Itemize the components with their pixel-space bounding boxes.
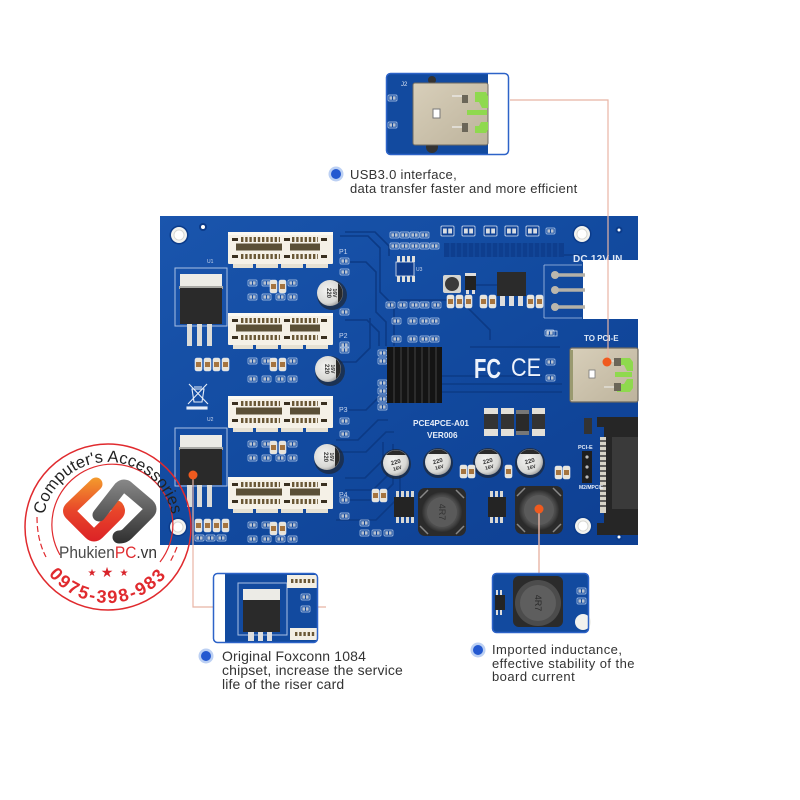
- stars: ★: [120, 568, 129, 579]
- bullet: chipset: [198, 648, 214, 664]
- bullet: USB: [328, 166, 344, 182]
- callout image: USB port close-up: [386, 74, 508, 154]
- recycling bin mark: [187, 384, 208, 409]
- PCIe slots: P1: [339, 249, 348, 256]
- callout line: inductor: [538, 510, 540, 573]
- heatsink: [387, 347, 442, 403]
- stamp circular text top: Computer's Accessories: [34, 450, 180, 514]
- stars: ★: [101, 564, 113, 580]
- jumper header: M2/MPCIE: [579, 485, 604, 491]
- wordmark: PhukienPC.vn: [59, 543, 157, 562]
- callout image: chipset close-up: [214, 574, 318, 642]
- USB port: TO PCI-E: [584, 334, 619, 343]
- PCIe slots: P3: [339, 407, 348, 414]
- stamp phone number: 0975-398-983: [50, 568, 164, 604]
- callout line: chipset: [193, 475, 326, 607]
- inductors: [418, 486, 563, 536]
- voltage regulators: U1: [207, 259, 214, 265]
- SOIC chips: U3: [416, 267, 423, 273]
- callout image: USB port close-up: J2: [401, 82, 408, 88]
- chain logo: [70, 484, 150, 537]
- caption: chipset: Original Foxconn 1084: [222, 648, 366, 664]
- small components: [195, 226, 570, 542]
- voltage regulators: U2: [207, 417, 214, 423]
- DC 12V connector: [544, 254, 638, 336]
- mounting holes: [168, 224, 622, 540]
- marker dot: inductor: [534, 504, 544, 514]
- FCC CE marks: CE: [511, 354, 541, 382]
- FCC CE marks: FC: [474, 353, 501, 384]
- DC 12V connector: DC 12V IN: [573, 254, 623, 265]
- jumper header: PCI-E: [578, 445, 593, 451]
- caption: inductor: Imported inductance,: [492, 642, 622, 657]
- electrolytic capacitors: [314, 280, 545, 479]
- marker dot: USB: [602, 358, 612, 366]
- stamp logo: PhukienPC.vn: [24, 443, 192, 611]
- bullet: inductor: [470, 642, 486, 658]
- board model label: PCE4PCE-A01: [413, 419, 469, 428]
- board model label: VER006: [427, 431, 458, 440]
- PCIe slots: [228, 232, 348, 513]
- USB port: [570, 334, 638, 402]
- stars: ★: [88, 568, 97, 579]
- SOIC chips: [394, 256, 506, 523]
- SATA power connector: [597, 417, 638, 535]
- small inductor and transistors: [443, 272, 526, 306]
- callout image: inductor close-up: 4R7: [533, 595, 543, 611]
- traces: [336, 232, 580, 520]
- caption: USB: data transfer faster and more efficient: [350, 181, 578, 196]
- caption: chipset: chipset, increase the service: [222, 662, 403, 678]
- board model label: [413, 419, 469, 440]
- callout image: inductor close-up: [492, 574, 591, 632]
- caption: inductor: board current: [492, 669, 575, 684]
- FCC CE marks: [474, 353, 541, 384]
- PCIe slots: P4: [339, 492, 348, 499]
- stars: [88, 564, 129, 580]
- jumper header: [578, 418, 604, 491]
- caption: USB: USB3.0 interface,: [350, 167, 457, 182]
- marker dot: chipset: [188, 470, 198, 480]
- inductors: 4R7: [437, 504, 447, 520]
- caption: chipset: life of the riser card: [222, 676, 344, 692]
- voltage regulators: [175, 259, 227, 507]
- PCIe slots: P2: [339, 333, 348, 340]
- fuses: [484, 408, 545, 436]
- panel: circuit board: [160, 216, 638, 545]
- callout line: USB: [510, 100, 608, 362]
- caption: inductor: effective stability of the: [492, 656, 635, 671]
